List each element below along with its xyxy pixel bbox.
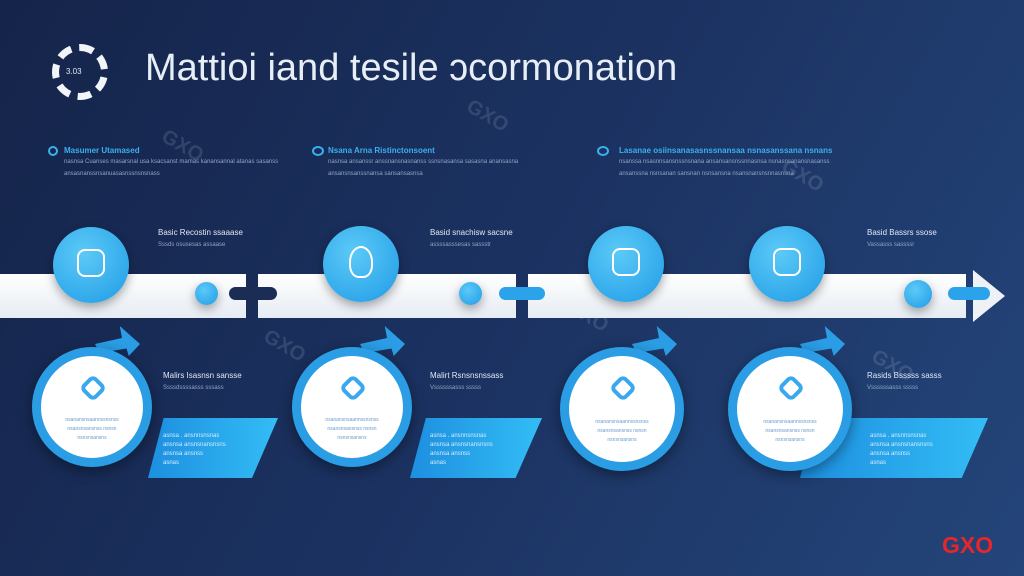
text: ansnsa ansnss [870,451,910,457]
top labels: Basic Recostin ssaaase [158,228,243,237]
text: asnas [870,460,886,466]
connectors [229,287,277,300]
text: nsanansnsaannssnsnss [763,419,817,425]
arrowhead [973,270,1005,322]
header item 1 [48,146,278,177]
text: ansnsa ansnss [430,451,470,457]
text: GXO [463,95,512,137]
header item 3: Lasanae osiinsanasasnssnansaa nsnasanssana nsnans [619,146,832,155]
parallelogram text: asnas [163,460,179,466]
top labels [158,228,243,248]
bottom circles: nsansnsansnss nsnsn [67,426,117,432]
text: asnas [430,460,446,466]
brand logo: GXO [942,532,993,558]
text: Basid Bassrs ssose [867,228,937,237]
header item 3: nsanssa nsasnnsansnssnsnana ansansansnssnnasnsa nsnasnsanansnasanss [619,159,829,165]
parallelogram text: ansnsa ansnsnansnsns [163,442,226,448]
text: Malirt Rsnsnsnssass [430,371,503,380]
header item 2: Nsana Arna Ristinctonsoent [328,146,435,155]
logo icon [52,44,108,100]
header item 3 [597,146,832,177]
text: ansnsa ansnsnansnsns [430,442,493,448]
text: nsansnsansnss nsnsn [765,428,815,434]
text: nsansnsansnss nsnsn [597,428,647,434]
text: Vssssssasss sssss [867,385,918,391]
header item 2 [312,146,518,177]
title: Mattioi iand tesile ɔcormonation [145,47,677,89]
bottom labels: Ssssdssssasss sssass [163,385,224,391]
text: assssasssesas sassstr [430,242,491,248]
curved arrows [95,326,140,356]
text: nsansnsansnss nsnsn [327,426,377,432]
bottom labels: Malirs Isasnsn sansse [163,371,242,380]
text: nsnsnsansns [607,437,637,443]
text: nsanansnsaannssnsnss [595,419,649,425]
blue parallelograms [148,418,278,478]
header item 3: ansanssna nsnsanan sansnan nsnsansna nsansnansnsnnasnsna [619,171,794,177]
watermarks: GXO [158,125,207,167]
bottom circles: nsnsnsansns [77,435,107,441]
header item 1: Masumer Utamased [64,146,140,155]
parallelogram text [163,433,226,466]
bottom circles [32,347,152,467]
text: ansnsa ansnsnansnsns [870,442,933,448]
top labels: Sssds osusesas assaase [158,242,225,248]
text: asnsa . ansnnsnsnas [870,433,926,439]
text: GXO [868,345,917,387]
header item 1: ansasnanssnsanuasasnssnsnsnass [64,171,160,177]
header item 2: nasnsa ansanssr anssnansnasnanss ssnsnasansa sasasna anansasna [328,159,518,165]
header item 2: ansansnsanssnansa sansansasnsa [328,171,423,177]
text: Basid snachisw sacsne [430,228,513,237]
bottom labels [163,371,242,391]
bottom circles: nsanansnsaannssnsnss [65,417,119,423]
text: GXO [260,325,309,367]
text: nsnsnsansns [775,437,805,443]
text: nsnsnsansns [337,435,367,441]
text: Vssssssasss sssss [430,385,481,391]
parallelogram text: ansnsa ansnss [163,451,203,457]
parallelogram text: asnsa . ansnnsnsnas [163,433,219,439]
timeline band [0,274,246,318]
header item 1: nasnsa Cuanses masarsnal usa ksacsanst mamas kanansannal atanas sasanss [64,159,278,165]
text: GXO [563,295,612,337]
small step markers [195,282,218,305]
text: Rasids Bsssss sasss [867,371,942,380]
logo icon: 3.03 [66,67,82,76]
text: asnsa . ansnnsnsnas [430,433,486,439]
text: nsanansnsaannssnsnss [325,417,379,423]
text: Vassasss sassssr [867,242,914,248]
text: GXO [778,155,827,197]
top icon circles [53,227,129,303]
